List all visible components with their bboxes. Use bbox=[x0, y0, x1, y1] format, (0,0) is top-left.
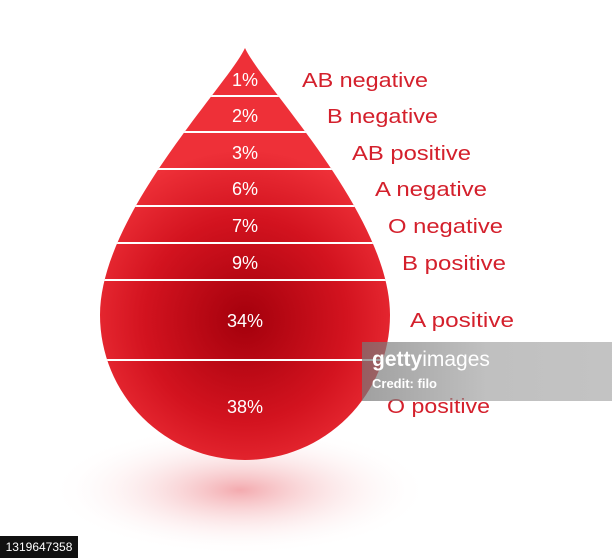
labels: B negative bbox=[327, 106, 438, 128]
percentages: 7% bbox=[232, 216, 258, 236]
watermark: Credit: filo bbox=[372, 376, 437, 391]
percentages: 1% bbox=[232, 70, 258, 90]
percentages: 34% bbox=[227, 311, 263, 331]
labels: A positive bbox=[410, 310, 514, 332]
labels: AB positive bbox=[352, 143, 471, 165]
percentages: 2% bbox=[232, 106, 258, 126]
percentages bbox=[227, 70, 263, 417]
blood drop chart bbox=[100, 48, 513, 534]
percentages: 6% bbox=[232, 179, 258, 199]
labels: AB negative bbox=[302, 70, 428, 92]
labels bbox=[302, 70, 514, 418]
watermark bbox=[362, 342, 612, 401]
percentages: 38% bbox=[227, 397, 263, 417]
labels: B positive bbox=[402, 253, 506, 275]
id tag: 1319647358 bbox=[6, 540, 72, 554]
id tag bbox=[0, 536, 78, 558]
labels: O positive bbox=[387, 396, 490, 418]
percentages: 9% bbox=[232, 253, 258, 273]
labels: A negative bbox=[375, 179, 487, 201]
shadow bbox=[50, 425, 430, 555]
watermark: gettyimages bbox=[372, 348, 490, 371]
labels: O negative bbox=[388, 216, 503, 238]
percentages: 3% bbox=[232, 143, 258, 163]
drop bbox=[90, 48, 400, 460]
